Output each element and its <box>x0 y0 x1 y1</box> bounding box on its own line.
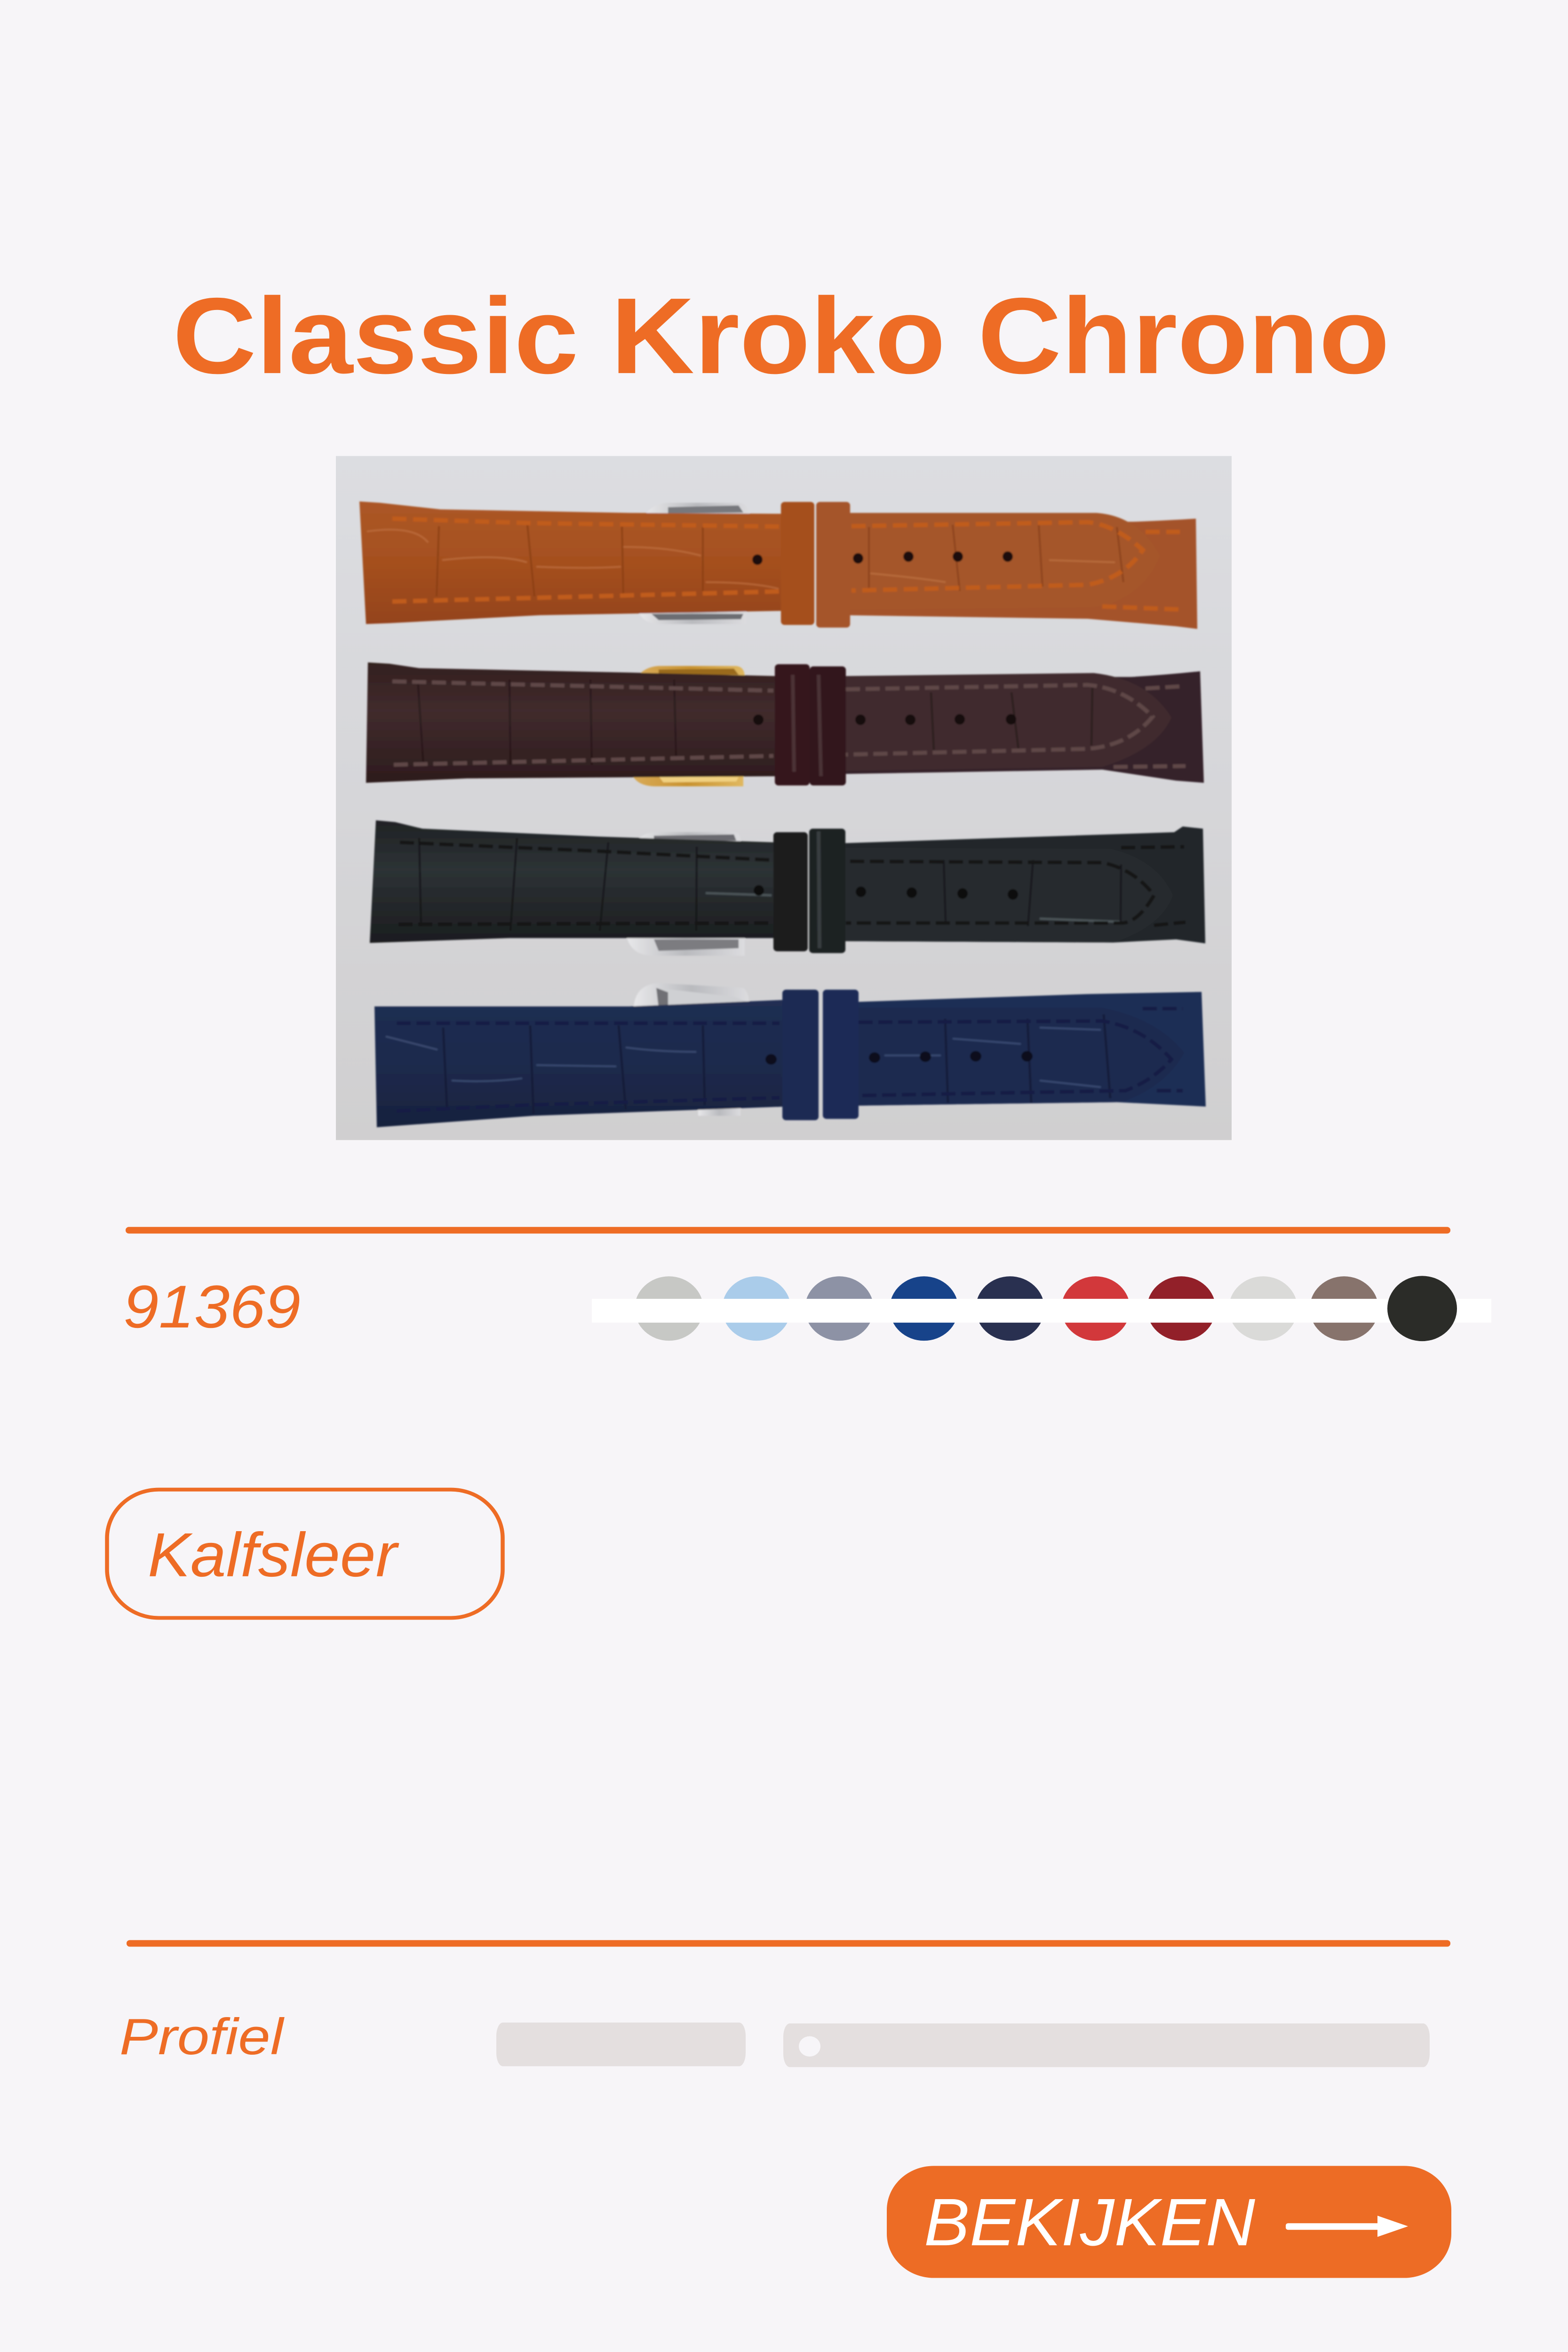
strap: dark brown <box>366 662 1204 787</box>
profile label: Profiel <box>119 2008 285 2065</box>
bottom divider line <box>127 1940 1450 1947</box>
material tag: Kalfsleer: Kalfsleer <box>148 1520 399 1589</box>
button: BEKIJKEN <box>887 2166 1451 2278</box>
material tag: Kalfsleer <box>107 1490 502 1618</box>
strap: cognac brown <box>359 501 1197 629</box>
top divider line <box>126 1227 1450 1233</box>
profile bar: right segment with marker <box>783 2024 1430 2067</box>
strap: black <box>370 820 1205 956</box>
strap: navy <box>374 983 1206 1127</box>
button: BEKIJKEN: BEKIJKEN <box>924 2185 1256 2260</box>
product photo: four watch straps <box>336 456 1232 1140</box>
icon: arrow <box>1286 2216 1408 2237</box>
profile bar: left segment <box>496 2023 746 2066</box>
article number: 91369 <box>123 1273 301 1341</box>
colour swatches <box>592 1276 1491 1341</box>
title: Classic Kroko Chrono <box>173 276 1390 397</box>
